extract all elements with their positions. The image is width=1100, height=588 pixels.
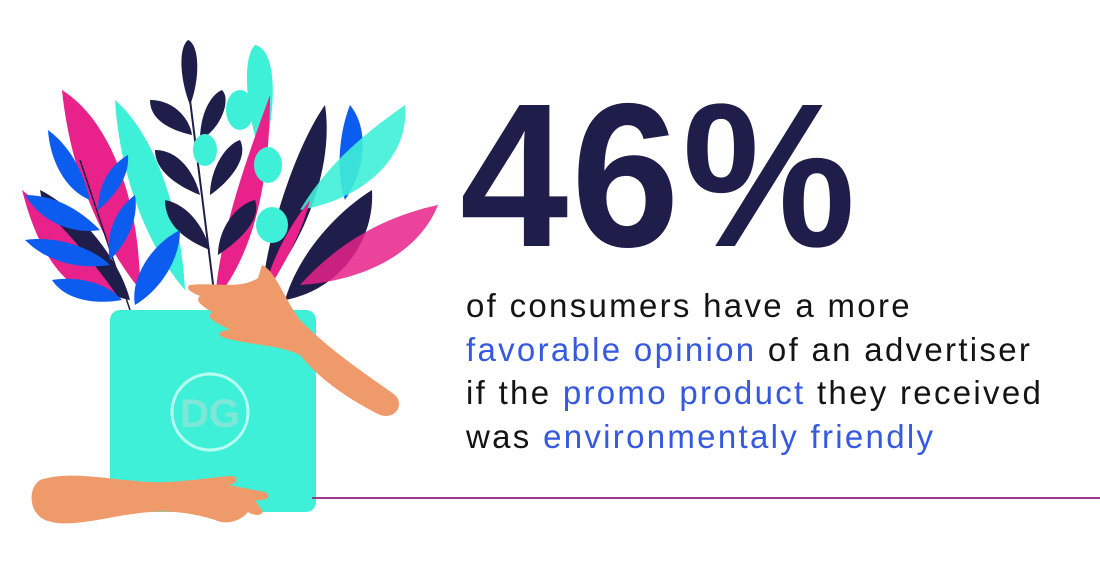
divider line bbox=[312, 497, 1100, 499]
hand top bbox=[188, 265, 399, 416]
statement text: favorable opinion of an advertiser bbox=[466, 330, 1032, 368]
statement text: was environmentaly friendly bbox=[466, 418, 935, 454]
illustration: bag with leaves and hands bbox=[22, 40, 438, 524]
leaves group bbox=[22, 40, 438, 310]
dark branch bbox=[150, 40, 256, 300]
bag bbox=[110, 310, 316, 512]
headline number: 46% bbox=[460, 61, 858, 290]
logo: DG bbox=[180, 392, 240, 436]
hand bottom bbox=[32, 476, 268, 523]
statement text bbox=[466, 287, 1043, 455]
blue branch bbox=[25, 130, 180, 310]
statement text: if the promo product they received bbox=[466, 374, 1043, 411]
statement text: of consumers have a more bbox=[466, 287, 912, 324]
logo bbox=[172, 374, 248, 450]
